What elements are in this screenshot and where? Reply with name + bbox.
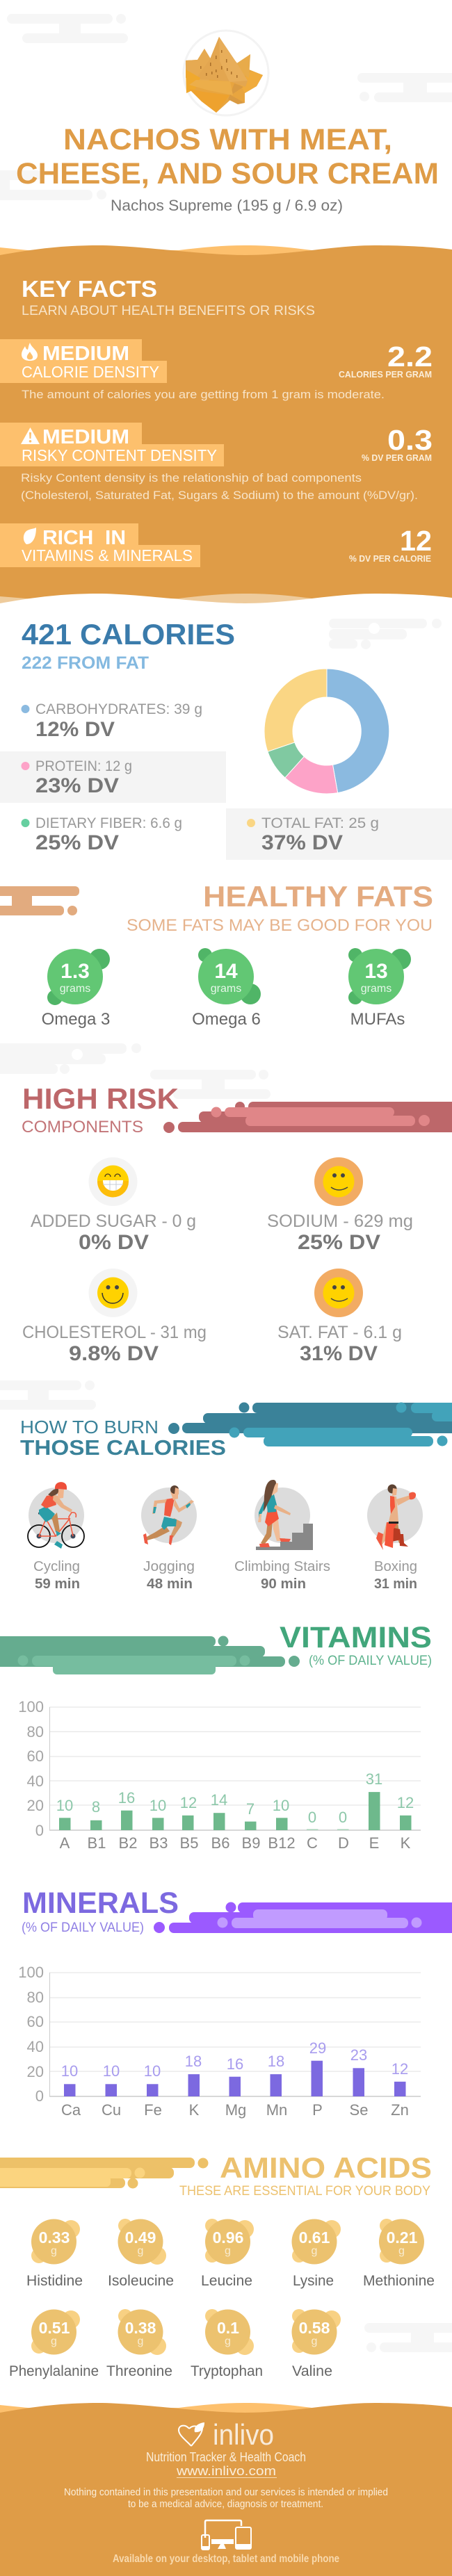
legend: carbohydrates: CARBOHYDRATES: 39 g — [35, 701, 202, 717]
exercise labels: 31 min — [374, 1576, 417, 1592]
banner: vitamins — [0, 1636, 300, 1674]
bar chart: vitamins: 31 — [366, 1770, 382, 1788]
stat: omega 6: Omega 6 — [192, 1010, 261, 1029]
exercise labels: Boxing — [374, 1559, 417, 1574]
fact: risky content density: RISKY CONTENT DENSITY — [22, 446, 217, 464]
item: added sugar — [31, 1157, 196, 1254]
panel: minerals — [18, 1886, 452, 2119]
fact: calorie density: 2.2 — [387, 341, 433, 373]
legend: total fat: TOTAL FAT: 25 g — [261, 815, 379, 831]
legend: carbohydrates: 12% DV — [35, 718, 115, 741]
fact: calorie density: CALORIES PER GRAM — [339, 369, 432, 380]
heading: minerals: (% OF DAILY VALUE) — [22, 1921, 144, 1935]
banner: amino acids — [0, 2158, 209, 2188]
item: cholesterol: CHOLESTEROL - 31 mg — [22, 1323, 207, 1342]
donut chart — [264, 669, 389, 794]
bar chart: minerals: Fe — [144, 2101, 162, 2119]
amino: methionine: g — [398, 2245, 405, 2257]
heading: key facts: KEY FACTS — [22, 276, 157, 302]
bar chart: vitamins: 7 — [246, 1800, 255, 1818]
item: added sugar: ADDED SUGAR - 0 g — [31, 1212, 196, 1231]
amino: isoleucine: Isoleucine — [108, 2273, 174, 2289]
heading: key facts: LEARN ABOUT HEALTH BENEFITS OR RISKS — [22, 304, 315, 318]
panel: high risk components — [0, 1043, 452, 1365]
fact: calorie density: MEDIUM — [42, 343, 129, 365]
bar chart: vitamins: 0 — [35, 1822, 44, 1839]
amino: histidine — [26, 2219, 83, 2289]
fact: risky content density — [0, 423, 433, 502]
bar chart: vitamins: 10 — [273, 1797, 289, 1814]
bar chart: minerals: 23 — [350, 2046, 367, 2064]
bar chart: vitamins: 60 — [27, 1747, 44, 1765]
amino: tryptophan: 0.1 — [217, 2319, 239, 2337]
bar chart: minerals: Ca — [61, 2101, 81, 2119]
amino: methionine — [363, 2219, 435, 2289]
legend: dietary fiber — [21, 815, 182, 854]
heading: key facts — [22, 276, 315, 318]
heading: calories — [22, 618, 235, 673]
heading: vitamins — [280, 1621, 432, 1668]
bar chart: vitamins: D — [338, 1834, 349, 1852]
bar chart: minerals: 16 — [227, 2055, 243, 2073]
panel: key facts — [0, 245, 452, 612]
amino: leucine — [201, 2219, 254, 2289]
stat: mufas: 13 — [364, 960, 388, 983]
bar chart: minerals: 80 — [27, 1989, 44, 2006]
bar chart: minerals: 100 — [18, 1964, 44, 1981]
item: cholesterol: 9.8% DV — [69, 1342, 159, 1365]
amino: valine — [292, 2309, 341, 2379]
bar chart: vitamins: B3 — [150, 1834, 168, 1852]
amino: valine: Valine — [292, 2363, 332, 2379]
bar chart: vitamins: 80 — [27, 1723, 44, 1741]
amino: tryptophan: g — [225, 2335, 231, 2347]
exercise: climbing stairs — [255, 1480, 313, 1550]
amino: phenylalanine — [9, 2309, 99, 2379]
amino: leucine: 0.96 — [213, 2228, 243, 2247]
bar chart: minerals: 40 — [27, 2038, 44, 2055]
banner: minerals — [154, 1902, 452, 1933]
legend: protein: PROTEIN: 12 g — [35, 758, 132, 774]
bar chart: minerals: Zn — [391, 2101, 409, 2119]
amino: methionine: 0.21 — [387, 2228, 418, 2247]
fact: risky content density: MEDIUM — [42, 426, 129, 448]
exercise labels — [33, 1559, 417, 1592]
legend: protein: 23% DV — [35, 774, 119, 797]
bar chart: vitamins: B2 — [119, 1834, 137, 1852]
amino: phenylalanine: g — [51, 2335, 57, 2347]
bar chart: minerals: 10 — [144, 2062, 161, 2080]
amino: valine: 0.58 — [299, 2319, 330, 2337]
legend: total fat — [226, 808, 452, 860]
bar chart: vitamins: 16 — [118, 1789, 135, 1807]
bar chart: vitamins: 8 — [92, 1798, 100, 1816]
exercise labels: Cycling — [33, 1559, 80, 1574]
panel: how to burn — [0, 1380, 452, 1592]
bar chart: vitamins: 0 — [339, 1809, 347, 1826]
bar chart: minerals: 18 — [185, 2053, 202, 2070]
heading: calories: 421 CALORIES — [22, 618, 235, 651]
amino: phenylalanine: 0.51 — [39, 2319, 70, 2337]
title: NACHOS WITH MEAT, — [63, 123, 392, 156]
title: CHEESE, AND SOUR CREAM — [16, 157, 439, 190]
heading: healthy fats — [127, 880, 433, 935]
amino: tryptophan: Tryptophan — [191, 2363, 263, 2379]
panel: amino acids — [0, 2151, 452, 2379]
heading: healthy fats: HEALTHY FATS — [203, 880, 433, 913]
bar chart: vitamins: B5 — [180, 1834, 198, 1852]
bar chart: minerals: 20 — [27, 2063, 44, 2080]
heading: amino acids: THESE ARE ESSENTIAL FOR YOUR BODY — [179, 2184, 430, 2199]
bar chart: minerals: K — [189, 2101, 200, 2119]
fact: rich in vitamins: RICH IN — [42, 527, 126, 549]
bar chart: minerals: Cu — [102, 2101, 121, 2119]
exercise labels: Climbing Stairs — [234, 1559, 330, 1574]
fact: risky content density: Risky Content density is the relationship of bad components — [21, 471, 362, 484]
fact: risky content density: (Cholesterol, Saturated Fat, Sugars & Sodium) to the amount (%DV/gr). — [21, 489, 418, 502]
amino: isoleucine: g — [138, 2245, 143, 2257]
bar chart: vitamins: C — [307, 1834, 318, 1852]
stat: omega 3 — [42, 949, 110, 1029]
bar chart: vitamins: 12 — [397, 1794, 414, 1811]
amino: lysine: g — [312, 2245, 317, 2257]
footer text — [64, 2450, 388, 2510]
bar chart: vitamins: 0 — [308, 1809, 316, 1826]
item: sodium: SODIUM - 629 mg — [267, 1212, 413, 1231]
heading: minerals: MINERALS — [22, 1886, 179, 1920]
legend: protein — [0, 751, 226, 803]
exercise labels: 59 min — [35, 1576, 80, 1592]
item: added sugar: 0% DV — [79, 1231, 149, 1254]
bar chart: minerals: 29 — [309, 2039, 326, 2057]
amino: leucine: g — [225, 2245, 231, 2257]
exercise labels: 90 min — [261, 1576, 306, 1592]
heading: high risk: COMPONENTS — [22, 1118, 143, 1136]
fact: risky content density: 0.3 — [387, 424, 433, 456]
bar chart: minerals — [18, 1964, 421, 2119]
bar chart: minerals: 60 — [27, 2013, 44, 2030]
bar chart: minerals: Mn — [266, 2101, 287, 2119]
item: sodium — [267, 1157, 413, 1254]
heading: amino acids — [179, 2151, 432, 2199]
stat: omega 3: grams — [60, 983, 90, 995]
exercise: cycling — [28, 1482, 84, 1549]
logo: inlivo: inlivo — [213, 2418, 274, 2451]
amino: leucine: Leucine — [201, 2273, 252, 2289]
bar chart: minerals: Se — [350, 2101, 368, 2119]
stat: mufas: grams — [361, 983, 392, 995]
exercise: boxing — [367, 1485, 423, 1550]
bar chart: vitamins: 12 — [180, 1794, 197, 1811]
item: saturated fat: SAT. FAT - 6.1 g — [277, 1323, 402, 1342]
bar chart: vitamins: B1 — [88, 1834, 106, 1852]
banner: risk — [163, 1102, 452, 1133]
fact: risky content density: % DV PER GRAM — [362, 453, 432, 463]
bar chart: minerals: 10 — [61, 2062, 78, 2080]
footer text: Nothing contained in this presentation and our services is intended or implied — [64, 2487, 388, 2498]
bar chart: minerals: 12 — [392, 2060, 408, 2078]
bar chart: vitamins: 40 — [27, 1772, 44, 1790]
amino: valine: g — [312, 2335, 317, 2347]
item: saturated fat: 31% DV — [300, 1342, 378, 1365]
legend: dietary fiber: DIETARY FIBER: 6.6 g — [35, 815, 182, 831]
exercise: jogging — [141, 1485, 197, 1545]
bar chart: minerals: P — [312, 2101, 323, 2119]
heading: vitamins: VITAMINS — [280, 1621, 432, 1654]
heading: how to burn: THOSE CALORIES — [20, 1435, 226, 1460]
legend: carbohydrates — [21, 701, 202, 741]
amino: histidine: 0.33 — [39, 2228, 70, 2247]
fact: rich in vitamins: VITAMINS & MINERALS — [22, 546, 193, 564]
amino: tryptophan — [191, 2309, 263, 2379]
amino: threonine: g — [138, 2335, 143, 2347]
item: sodium: 25% DV — [298, 1231, 380, 1254]
bar chart: vitamins: B6 — [211, 1834, 229, 1852]
icon: flame — [22, 343, 38, 361]
bar chart: vitamins: E — [369, 1834, 379, 1852]
legend: dietary fiber: 25% DV — [35, 831, 119, 854]
legend: total fat: 37% DV — [261, 831, 343, 854]
panel: calories — [0, 618, 452, 860]
amino: lysine — [292, 2219, 341, 2289]
amino: isoleucine: 0.49 — [125, 2228, 156, 2247]
heading: high risk: HIGH RISK — [22, 1082, 179, 1115]
icon: devices — [202, 2520, 251, 2550]
fact: rich in vitamins: 12 — [400, 525, 432, 557]
bar chart: vitamins: 10 — [56, 1797, 73, 1814]
heading: high risk — [22, 1082, 179, 1136]
item: cholesterol — [22, 1269, 207, 1365]
footer text: Nutrition Tracker & Health Coach — [146, 2450, 306, 2464]
icon: leaf — [24, 528, 36, 544]
stat: mufas: MUFAs — [350, 1010, 405, 1029]
heading: vitamins: (% OF DAILY VALUE) — [309, 1654, 432, 1668]
stat: omega 3: Omega 3 — [42, 1010, 110, 1029]
panel: vitamins — [0, 1621, 432, 1852]
bar chart: vitamins: 100 — [18, 1698, 44, 1715]
footer availability note: Available on your desktop, tablet and mobile phone — [113, 2553, 339, 2565]
amino: lysine: Lysine — [293, 2273, 334, 2289]
bar chart: vitamins: B12 — [268, 1834, 296, 1852]
amino: histidine: Histidine — [26, 2273, 83, 2289]
amino: lysine: 0.61 — [299, 2228, 330, 2247]
item: saturated fat — [277, 1269, 402, 1365]
bar chart: vitamins: K — [401, 1834, 411, 1852]
heading: how to burn — [20, 1417, 226, 1460]
panel: healthy fats — [0, 880, 433, 1029]
bar chart: vitamins — [18, 1698, 421, 1852]
heading: amino acids: AMINO ACIDS — [220, 2151, 432, 2184]
heading: how to burn: HOW TO BURN — [20, 1417, 159, 1437]
stat: omega 6: 14 — [214, 960, 238, 983]
fact: rich in vitamins — [0, 523, 432, 567]
bar chart: vitamins: 10 — [150, 1797, 166, 1814]
nacho chips image — [184, 31, 268, 115]
heading: calories: 222 FROM FAT — [22, 653, 149, 673]
amino: threonine: Threonine — [106, 2363, 172, 2379]
title — [16, 123, 439, 190]
stat: mufas — [348, 948, 411, 1029]
bar chart: minerals: Mg — [225, 2101, 246, 2119]
bar chart: minerals: 10 — [103, 2062, 120, 2080]
heading: healthy fats: SOME FATS MAY BE GOOD FOR YOU — [127, 916, 433, 935]
fact: calorie density: CALORIE DENSITY — [22, 363, 159, 381]
banner: burn — [168, 1403, 452, 1446]
exercise labels: Jogging — [143, 1559, 195, 1574]
amino: threonine — [106, 2309, 172, 2379]
bar chart: vitamins: 14 — [211, 1791, 227, 1809]
panel: footer — [0, 2403, 452, 2576]
fact: rich in vitamins: % DV PER CALORIE — [349, 553, 431, 564]
bar chart: minerals: 0 — [35, 2087, 44, 2105]
bar chart: vitamins: A — [60, 1834, 70, 1852]
hero panel — [0, 14, 452, 214]
stat: omega 3: 1.3 — [60, 960, 90, 983]
heading: minerals — [22, 1886, 179, 1935]
bar chart: vitamins: 20 — [27, 1797, 44, 1814]
fact: calorie density — [0, 339, 433, 401]
stat: omega 6 — [192, 948, 261, 1029]
subtitle: Nachos Supreme (195 g / 6.9 oz) — [111, 197, 343, 214]
footer text: to be a medical advice, diagnosis or treatment. — [128, 2499, 323, 2510]
amino: phenylalanine: Phenylalanine — [9, 2363, 99, 2379]
exercise labels: 48 min — [147, 1576, 193, 1592]
footer text: www.inlivo.com — [176, 2464, 276, 2478]
amino: isoleucine — [108, 2219, 174, 2289]
icon: warning triangle — [21, 427, 40, 444]
bar chart: vitamins: B9 — [242, 1834, 260, 1852]
logo: inlivo — [179, 2418, 274, 2451]
fact: calorie density: The amount of calories you are getting from 1 gram is moderate. — [22, 388, 385, 401]
amino: threonine: 0.38 — [125, 2319, 156, 2337]
bar chart: minerals: 18 — [268, 2053, 284, 2070]
amino: histidine: g — [51, 2245, 57, 2257]
amino: methionine: Methionine — [363, 2273, 435, 2289]
stat: omega 6: grams — [211, 983, 241, 995]
